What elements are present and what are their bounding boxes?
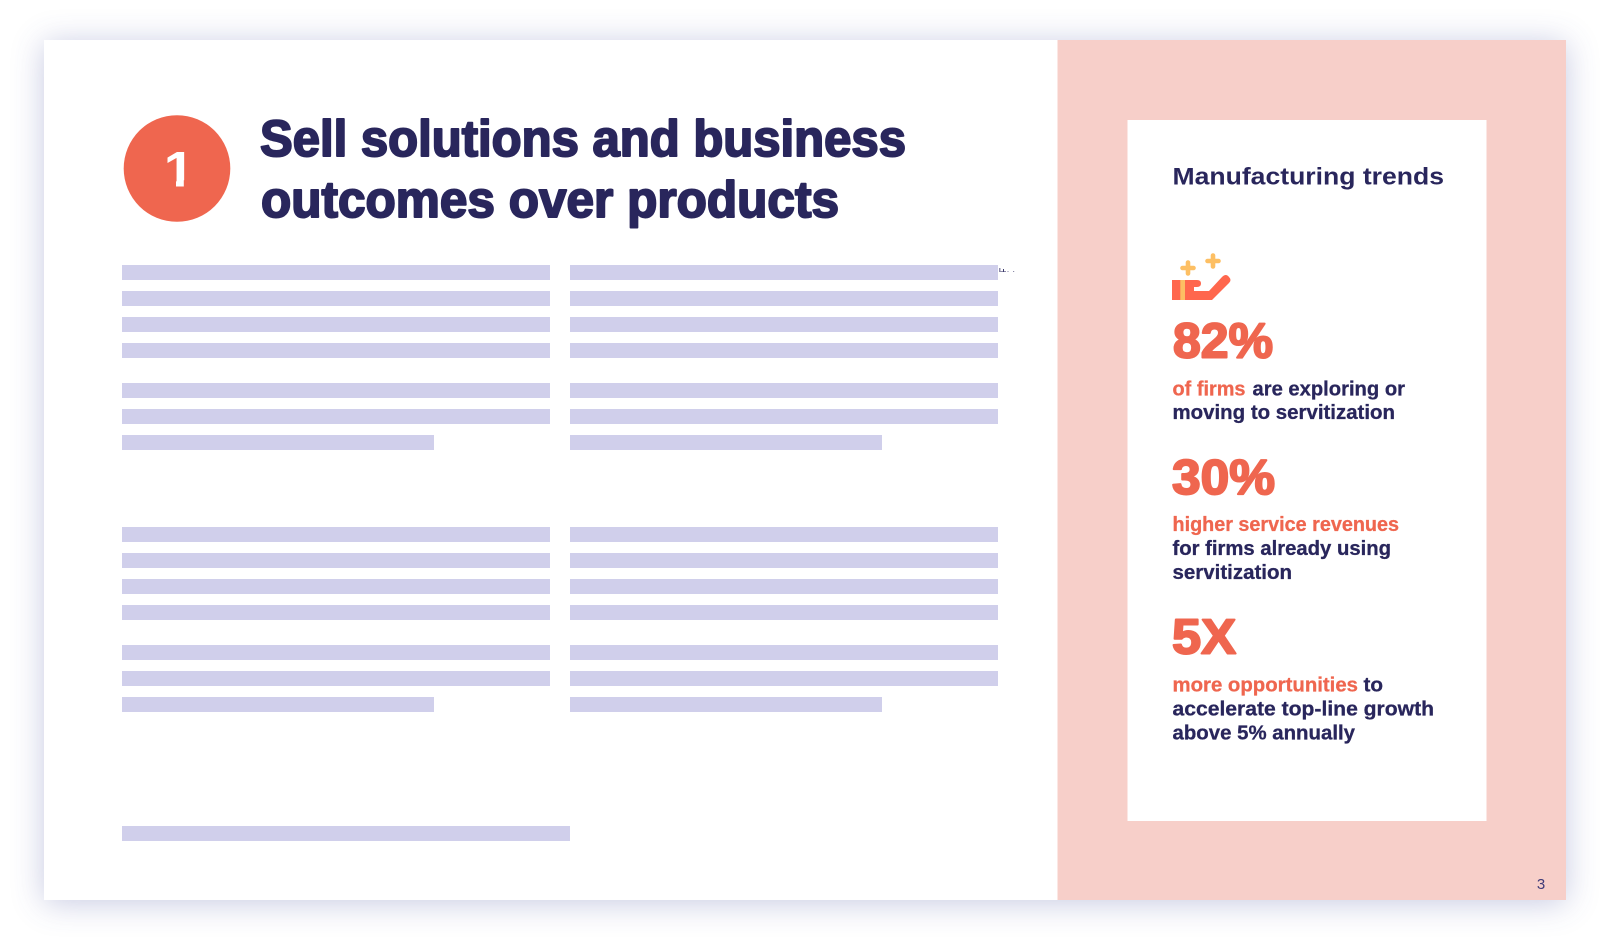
stray specks beside first bar	[999, 268, 1014, 272]
stat description: 5X	[1172, 674, 1434, 744]
stat description: 82%: moving to servitization	[1172, 401, 1395, 424]
stat: 82%: 82%	[1173, 314, 1273, 368]
stat: 30%: 30%	[1172, 451, 1275, 505]
stat description: 82%: are exploring or	[1252, 378, 1405, 400]
stat: 5X: 5X	[1172, 610, 1236, 664]
text placeholder: footer line	[122, 826, 570, 841]
stat description: 82%	[1172, 378, 1405, 424]
card heading: Manufacturing trends	[1172, 164, 1444, 190]
panel: manufacturing trends card	[1128, 120, 1486, 821]
stat description: 5X: more opportunities	[1172, 674, 1358, 696]
title	[260, 110, 906, 228]
stat description: 5X: accelerate top-line growth	[1172, 698, 1434, 720]
page number: 3	[1537, 876, 1545, 893]
stat description: 30%: servitization	[1172, 561, 1292, 584]
panel: pink sidebar background	[1058, 40, 1566, 900]
stat description: 30%	[1172, 513, 1399, 584]
stat description: 5X: above 5% annually	[1172, 722, 1356, 744]
text placeholder block: upper	[122, 265, 998, 450]
stat description: 30%: higher service revenues	[1172, 513, 1399, 536]
stat description: 82%: of firms	[1172, 378, 1246, 400]
badge: number 1: 1	[164, 142, 194, 198]
text placeholder block: lower	[122, 527, 998, 712]
badge: number 1	[124, 115, 230, 222]
title: outcomes over products	[261, 171, 839, 228]
icon: hand with sparkles	[1172, 256, 1230, 300]
stat description: 30%: for firms already using	[1172, 537, 1391, 560]
title: Sell solutions and business	[260, 110, 906, 167]
stat description: 5X: to	[1364, 674, 1383, 696]
